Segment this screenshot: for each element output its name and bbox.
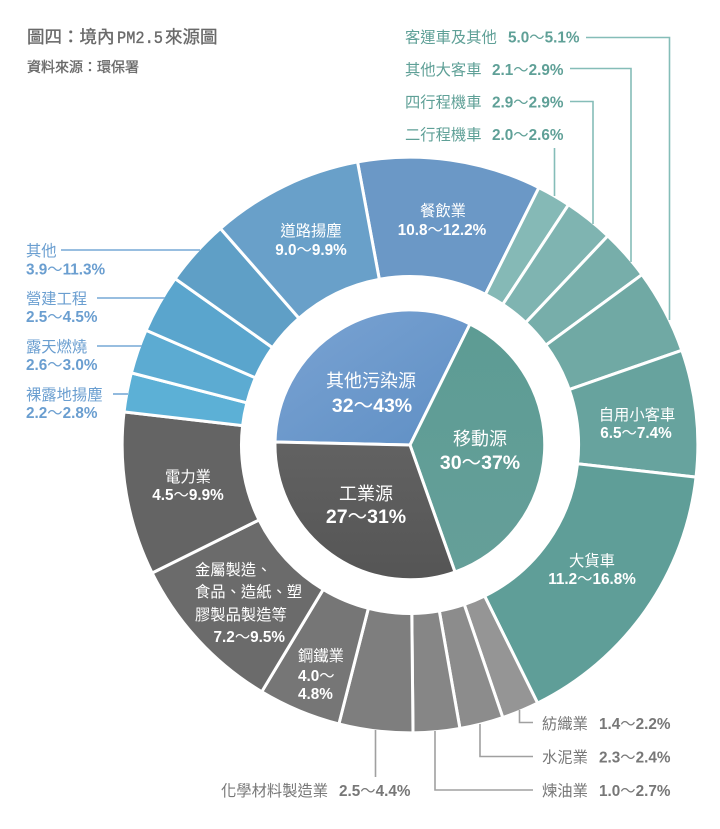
callout: 其他: 其他: [26, 243, 57, 260]
sector: 電力業: [122, 412, 259, 573]
sector: 道路揚塵: [220, 162, 379, 318]
value: 其他污染源: 32～43%: [332, 395, 412, 417]
callout: 露天燃燒: 露天燃燒: [26, 339, 87, 356]
title: [27, 27, 218, 49]
sector: 煉油業: [412, 611, 460, 733]
callout: 紡織業: 1.4～2.2%: [599, 716, 671, 733]
title: 來源圖: [165, 27, 218, 47]
callout: 紡織業: 紡織業: [542, 716, 588, 733]
callout: 營建工程: 2.5～4.5%: [26, 309, 98, 326]
sector: 紡織業: [464, 596, 538, 718]
callout: 露天燃燒: 2.6～3.0%: [26, 357, 98, 374]
value: 餐飲業: 10.8～12.2%: [398, 222, 487, 239]
sector: 水泥業: [439, 604, 503, 728]
label: 電力業: 電力業: [165, 469, 211, 486]
callout: 紡織業: [520, 710, 671, 733]
callout: 營建工程: 營建工程: [26, 291, 87, 308]
callout: 客運車及其他: 5.0～5.1%: [508, 30, 580, 46]
callout: 化學材料製造業: 2.5～4.4%: [339, 783, 411, 800]
sector: 鋼鐵業: [262, 589, 368, 724]
label: 金屬製造等: 金屬製造、: [195, 562, 272, 579]
labels inside outer ring: [152, 203, 675, 588]
callout: 煉油業: 1.0～2.7%: [599, 783, 671, 800]
sector: 餐飲業: [358, 157, 539, 294]
callout: 裸露地揚塵: 裸露地揚塵: [26, 386, 102, 404]
callout: 水泥業: 水泥業: [542, 750, 588, 766]
title: 圖四：境內: [27, 27, 114, 47]
inner slice: 工業源: [275, 442, 455, 580]
value: 移動源: 30～37%: [440, 452, 520, 474]
callout: 其他大客車: [405, 62, 631, 262]
callout: 二行程機車: 2.0～2.6%: [492, 127, 564, 144]
callouts: industrial sources (bottom): [221, 710, 671, 800]
callout: 客運車及其他: [405, 30, 670, 320]
callout: 化學材料製造業: [221, 730, 411, 800]
callout: 四行程機車: [405, 94, 593, 224]
callouts: other sources (left): [26, 243, 200, 422]
callout: 客運車及其他: 客運車及其他: [405, 30, 497, 46]
value: 道路揚塵: 9.0～9.9%: [275, 242, 347, 259]
sector: 二行程機車: [485, 188, 568, 304]
label: 鋼鐵業: 4.0～: [298, 668, 335, 685]
sector: 自用小客車: [569, 350, 698, 477]
callout: 水泥業: [480, 724, 671, 766]
callouts: mobile sources (top right): [405, 30, 670, 320]
callout: 化學材料製造業: 化學材料製造業: [221, 782, 328, 800]
callout: 其他大客車: 其他大客車: [405, 62, 482, 79]
label: 鋼鐵業: 鋼鐵業: [298, 648, 344, 665]
label: 金屬製造等: 膠製品製造等: [195, 606, 287, 624]
label: 金屬製造等: [195, 562, 302, 646]
label: 鋼鐵業: [298, 648, 344, 703]
callout: 煉油業: [435, 731, 671, 800]
sector: 營建工程: [146, 279, 272, 378]
label: 鋼鐵業: 4.8%: [298, 686, 333, 703]
label: 金屬製造等: 食品、造紙、塑: [195, 584, 302, 601]
callout: 四行程機車: 2.9～2.9%: [492, 94, 564, 112]
label: 工業源: 工業源: [339, 484, 393, 504]
sector: 四行程機車: [503, 205, 608, 323]
callout: 其他: 3.9～11.3%: [26, 262, 106, 278]
callout: 二行程機車: [405, 127, 564, 196]
sector: 其他大客車: [526, 236, 642, 345]
callout: 四行程機車: 四行程機車: [405, 94, 482, 112]
sector: 金屬製造等: [152, 520, 323, 692]
sector: 客運車及其他: [546, 275, 682, 390]
inner slice: 其他污染源: [275, 310, 470, 445]
callout: 二行程機車: 二行程機車: [405, 127, 482, 144]
callout: 露天燃燒: [26, 339, 142, 374]
label: 大貨車: 大貨車: [569, 552, 615, 570]
callout: 裸露地揚塵: 2.2～2.8%: [26, 405, 98, 422]
sector: 其他: [175, 228, 299, 348]
label: 金屬製造等: 7.2～9.5%: [214, 629, 285, 646]
value: 自用小客車: 6.5～7.4%: [600, 425, 672, 442]
value: 電力業: 4.5～9.9%: [152, 487, 224, 504]
callout: 營建工程: [26, 291, 165, 326]
source note: 資料來源：環保署: [27, 59, 139, 75]
callout: 水泥業: 2.3～2.4%: [599, 750, 671, 766]
label: 餐飲業: 餐飲業: [420, 203, 466, 220]
outer ring: sector breakdown: [122, 157, 698, 733]
value: 工業源: 27～31%: [326, 506, 406, 528]
callout: 裸露地揚塵: [26, 386, 128, 422]
inner labels: [326, 371, 520, 528]
sector: 大貨車: [485, 464, 696, 703]
inner pie: main source categories: [275, 310, 545, 580]
inner slice: 移動源: [410, 324, 545, 572]
label: 移動源: 移動源: [453, 429, 507, 449]
sector: 露天燃燒: [131, 330, 255, 403]
callout: 其他大客車: 2.1～2.9%: [492, 62, 564, 79]
callout: 其他: [26, 243, 200, 278]
label: 其他污染源: 其他污染源: [326, 371, 416, 391]
sector: 化學材料製造業: [339, 608, 413, 733]
value: 大貨車: 11.2～16.8%: [548, 571, 636, 588]
title: PM2.5: [117, 29, 163, 49]
label: 道路揚塵: 道路揚塵: [280, 222, 342, 240]
callout: 煉油業: 煉油業: [542, 783, 588, 800]
label: 自用小客車: 自用小客車: [599, 407, 675, 424]
sector: 裸露地揚塵: [124, 373, 247, 426]
